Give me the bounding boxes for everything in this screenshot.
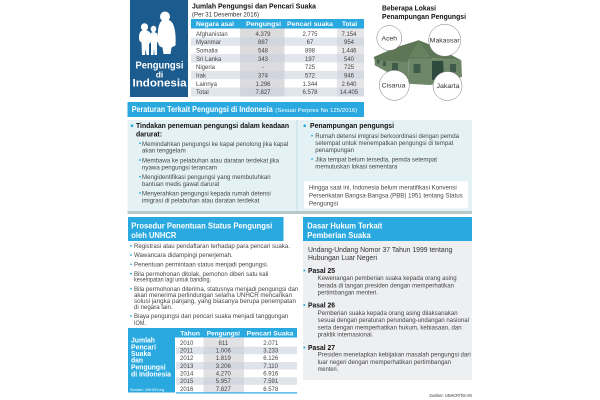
text block: pasal 26: sesuai dengan peraturan perundang-undangan nasional xyxy=(318,318,469,324)
text block: pasal 26: praktik internasional. xyxy=(318,333,374,339)
text block: tindakan penemuan xyxy=(131,123,289,204)
banner: peraturan terkait pengungsi: Peraturan Terkait Pengungsi di Indonesia xyxy=(132,105,273,114)
table: tahun pengungsi pencari suaka: 2014 xyxy=(180,372,194,378)
source note: Sumber: UNHCR/Tim MI xyxy=(429,393,472,398)
table: tahun pengungsi pencari suaka: 7.591 xyxy=(263,379,279,385)
panel: jumlah pencari suaka dan pengungsi: dan xyxy=(131,358,143,364)
panel: prosedur penentuan status xyxy=(128,217,298,327)
table: tahun pengungsi pencari suaka: 6.578 xyxy=(263,387,279,393)
text block: undang-undang: Hubungan Luar Negeri xyxy=(308,255,377,262)
text block: undang-undang xyxy=(308,247,452,262)
text block: pasal 25: berada di tangan presiden dengan memperhatikan xyxy=(318,283,454,289)
table: tahun pengungsi pencari suaka: 811 xyxy=(219,341,229,347)
table: tahun pengungsi pencari suaka: 1.819 xyxy=(216,356,231,362)
table: tahun pengungsi pencari suaka: 5.957 xyxy=(216,379,231,385)
callout: konvensi PBB 1951: Pengungsi xyxy=(309,202,338,208)
table: tahun pengungsi pencari suaka: 3.233 xyxy=(263,348,279,354)
list: langkah prosedur: di negara lain. xyxy=(134,305,173,311)
banner: peraturan terkait pengungsi xyxy=(128,102,364,117)
text block: tindakan penemuan: Tindakan penemuan pengungsi dalam keadaan xyxy=(136,123,289,130)
location: Aceh: Aceh xyxy=(382,36,397,42)
table: tahun pengungsi pencari suaka: Pencari Suaka xyxy=(247,331,294,338)
text block: penampungan pengungsi: Penampungan pengungsi xyxy=(310,123,394,130)
table: pengungsi by country: Negara asal xyxy=(196,21,234,28)
text block: pasal 25 xyxy=(303,268,457,296)
table: pengungsi by country: Sri Lanka xyxy=(196,57,222,63)
table: pengungsi by country: 946 xyxy=(344,74,355,80)
list: langkah prosedur: Wawancara didampingi penerjemah. xyxy=(134,253,233,259)
table: tahun pengungsi pencari suaka: 2012 xyxy=(180,356,194,362)
text block: tindakan penemuan: imigrasi di pelabuhan atau daratan terdekat xyxy=(142,198,260,204)
text block: tindakan penemuan: nyawa pengungsi terancam xyxy=(142,166,217,172)
callout: konvensi PBB 1951 xyxy=(304,182,468,208)
panel: title block Pengungsi di Indonesia xyxy=(130,0,188,97)
table: pengungsi by country: 725 xyxy=(305,65,316,71)
table: tahun pengungsi pencari suaka: 4.270 xyxy=(216,372,231,378)
panel: jumlah pencari suaka dan pengungsi: Pencari xyxy=(131,344,156,352)
panel: jumlah pencari suaka dan pengungsi: Sumber: UNHCR.org xyxy=(130,387,164,392)
text block: penampungan pengungsi: memutuskan lokasi sementara xyxy=(315,165,398,171)
table: pengungsi by country: 954 xyxy=(344,40,355,46)
table: pengungsi by country: Pengungsi xyxy=(246,21,281,28)
list: langkah prosedur: Bila permohonan ditolak, pemohon diberi satu kali xyxy=(134,272,268,278)
table: pengungsi by country: 887 xyxy=(258,40,269,46)
table: pengungsi by country: 572 xyxy=(305,74,316,80)
table: pengungsi by country: 6.578 xyxy=(302,90,318,96)
table: pengungsi by country: 374 xyxy=(258,74,269,80)
table: pengungsi by country: - xyxy=(262,65,264,71)
table: pengungsi by country: 7.154 xyxy=(341,32,357,38)
table: pengungsi by country: 898 xyxy=(305,48,316,54)
table: pengungsi by country: Pencari suaka xyxy=(287,21,333,28)
heading: jumlah pengungsi dan pencari suaka xyxy=(192,2,317,18)
table: pengungsi by country: Myanmar xyxy=(196,40,221,46)
location: Jakarta: Jakarta xyxy=(436,83,460,90)
text block: penampungan pengungsi: penampungan xyxy=(315,148,354,154)
heading: dasar hukum: Pemberian Suaka xyxy=(307,231,371,240)
heading: dasar hukum xyxy=(303,217,472,241)
table: tahun pengungsi pencari suaka xyxy=(175,328,297,394)
list: langkah prosedur: Penentuan permintaan status menjadi pengungsi. xyxy=(134,262,269,268)
table: pengungsi by country: 197 xyxy=(305,57,316,63)
table: tahun pengungsi pencari suaka: 2011 xyxy=(180,348,194,354)
panel: lokasi penampungan pengungsi xyxy=(374,4,466,100)
table: tahun pengungsi pencari suaka: 3.206 xyxy=(216,364,231,370)
heading: prosedur: oleh UNHCR xyxy=(131,231,177,240)
table: tahun pengungsi pencari suaka: Tahun xyxy=(180,331,200,338)
panel: title block Pengungsi di Indonesia: di xyxy=(156,70,163,80)
table: tahun pengungsi pencari suaka: 2015 xyxy=(180,379,194,385)
text block: tindakan penemuan: darurat: xyxy=(136,131,162,138)
table: pengungsi by country: 343 xyxy=(258,57,269,63)
table: tahun pengungsi pencari suaka: 2013 xyxy=(180,364,194,370)
list: langkah prosedur: Biaya pengungsi dan pencari suaka menjadi tanggungan xyxy=(134,314,288,320)
list: langkah prosedur: kesempatan lagi untuk banding. xyxy=(134,278,211,284)
panel: jumlah pencari suaka dan pengungsi xyxy=(128,328,297,394)
table: tahun pengungsi pencari suaka: 7.110 xyxy=(263,364,279,370)
text block: pasal 27: menteri. xyxy=(318,367,339,373)
location: Cisarua: Cisarua xyxy=(382,82,406,90)
table: pengungsi by country: Lainnya xyxy=(196,82,218,88)
location: Makassar: Makassar xyxy=(430,38,461,44)
text block: pasal 27: luar negeri dengan memperhatikan pertimbangan xyxy=(318,360,451,366)
panel: title block Pengungsi di Indonesia: Indonesia xyxy=(132,78,187,90)
table: tahun pengungsi pencari suaka: 6.126 xyxy=(263,356,279,362)
panel: peraturan content xyxy=(128,120,472,214)
panel: title block Pengungsi di Indonesia: Pengungsi xyxy=(136,60,184,72)
text block: pasal 27: Presiden menetapkan kebijakan masalah pengungsi dari xyxy=(318,353,471,359)
table: pengungsi by country: 540 xyxy=(344,57,355,63)
table: pengungsi by country: 67 xyxy=(307,40,314,46)
text block: tindakan penemuan: Memindahkan pengungsi ke kapal penolong jika kapal xyxy=(142,142,288,148)
text block: pasal 26: serta dengan memperhatikan hukum, kebiasaan, dan xyxy=(318,326,462,332)
text block: penampungan pengungsi: Jika tempat belum tersedia, pemda setempat xyxy=(315,158,437,164)
list: langkah prosedur xyxy=(130,244,298,327)
panel: lokasi penampungan pengungsi: Beberapa Lokasi xyxy=(382,4,436,12)
list: langkah prosedur: Bila permohonan diterima, statusnya menjadi pengungsi dan xyxy=(134,287,298,293)
table: pengungsi by country: 2.775 xyxy=(302,32,318,38)
icon: refugee family silhouette xyxy=(139,12,176,55)
panel: dasar hukum pemberian suaka xyxy=(303,217,472,380)
table: tahun pengungsi pencari suaka: Pengungsi xyxy=(207,331,240,338)
heading: jumlah pengungsi dan pencari suaka: Jumlah Pengungsi dan Pencari Suaka xyxy=(192,2,317,10)
callout: konvensi PBB 1951: Perserikatan Bangsa-Bangsa (PBB) 1951 tentang Status xyxy=(309,194,463,200)
table: pengungsi by country: 1.446 xyxy=(341,48,357,54)
text block: pasal 26: Pemberian suaka kepada orang asing dilaksanakan xyxy=(318,311,458,317)
panel: jumlah pencari suaka dan pengungsi: Pengungsi xyxy=(131,364,166,372)
text block: pasal 26 xyxy=(303,302,469,339)
table: pengungsi by country: Somalia xyxy=(196,48,218,54)
heading: prosedur: Prosedur Penentuan Status Pengungsi xyxy=(131,222,272,230)
heading: dasar hukum: Dasar Hukum Terkait xyxy=(307,222,383,230)
text block: penampungan pengungsi: setempat untuk menempatkan pengungsi di tempat xyxy=(315,141,454,147)
text block: undang-undang: Undang-Undang Nomor 37 Tahun 1999 tentang xyxy=(308,247,452,254)
table: tahun pengungsi pencari suaka: 2010 xyxy=(180,341,194,347)
text block: tindakan penemuan: Mengidentifikasi pengungsi yang membutuhkan xyxy=(142,175,271,181)
heading: jumlah pengungsi dan pencari suaka: (Per 31 Desember 2016) xyxy=(192,12,259,18)
text block: pasal 25: Pasal 25 xyxy=(308,268,335,275)
text block: tindakan penemuan: Menyerahkan pengungsi kepada rumah detensi xyxy=(142,191,271,197)
table: pengungsi by country: Nigeria xyxy=(196,65,216,71)
table: pengungsi by country: 1.344 xyxy=(302,82,318,88)
panel: lokasi penampungan pengungsi: Penampungan Pengungsi xyxy=(382,12,466,21)
callout: konvensi PBB 1951: Hingga saat ini, Indonesia belum meratifikasi Konvensi xyxy=(309,185,457,191)
text block: tindakan penemuan: akan tenggelam xyxy=(142,148,186,154)
panel: jumlah pencari suaka dan pengungsi: Suaka xyxy=(131,351,151,358)
banner: peraturan terkait pengungsi: (Sesuai Perpres No 125/2016) xyxy=(275,108,357,114)
table: pengungsi by country: 1.296 xyxy=(255,82,271,88)
text block: pasal 26: Pasal 26 xyxy=(308,302,335,310)
table: pengungsi by country: Irak xyxy=(196,74,207,80)
text block: pasal 25: pertimbangan menteri. xyxy=(318,290,378,296)
heading: prosedur xyxy=(128,217,284,241)
table: pengungsi by country: 14.405 xyxy=(340,90,359,96)
text block: penampungan pengungsi: Rumah detensi imigrasi berkoordinasi dengan pemda xyxy=(315,134,460,140)
table: pengungsi by country: 2.640 xyxy=(341,82,357,88)
text block: pasal 25: Kewenangan pemberian suaka kepada orang asing xyxy=(318,276,457,282)
table: pengungsi by country: 725 xyxy=(344,65,355,71)
table: pengungsi by country: Total xyxy=(342,21,357,28)
list: langkah prosedur: IOM. xyxy=(134,321,146,327)
text block: tindakan penemuan: Membawa ke pelabuhan atau daratan terdekat jika xyxy=(142,158,280,164)
table: pengungsi by country: 7.827 xyxy=(255,90,271,96)
table: tahun pengungsi pencari suaka: 2.071 xyxy=(263,341,279,347)
table: pengungsi by country: 4.379 xyxy=(255,32,271,38)
table: tahun pengungsi pencari suaka: 1.006 xyxy=(216,348,231,354)
table: tahun pengungsi pencari suaka: 6.916 xyxy=(263,372,279,378)
table: pengungsi by country: 548 xyxy=(258,48,269,54)
list: langkah prosedur: Registrasi atau pendaftaran terhadap para pencari suaka. xyxy=(134,244,290,250)
text block: tindakan penemuan: bantuan medis gawat darurat xyxy=(142,182,220,188)
text block: pasal 27 xyxy=(303,345,471,373)
table: tahun pengungsi pencari suaka: 7.827 xyxy=(216,387,231,393)
text block: penampungan pengungsi xyxy=(303,123,460,171)
table: tahun pengungsi pencari suaka: 2016 xyxy=(180,387,194,393)
panel: jumlah pencari suaka dan pengungsi: Jumlah xyxy=(131,338,155,344)
list: langkah prosedur: akan menerima perlindungan selama UNHCR mencarikan xyxy=(134,293,292,299)
icon: army tent xyxy=(374,40,462,85)
panel: jumlah pencari suaka dan pengungsi: di Indonesia xyxy=(131,372,171,378)
list: langkah prosedur: solusi jangka panjang, yang biasanya berupa penempatan xyxy=(134,299,296,305)
text block: pasal 27: Pasal 27 xyxy=(308,345,335,352)
table: pengungsi by country xyxy=(191,19,364,96)
table: pengungsi by country: Total xyxy=(196,90,209,96)
table: pengungsi by country: Afghanistan xyxy=(196,32,228,38)
